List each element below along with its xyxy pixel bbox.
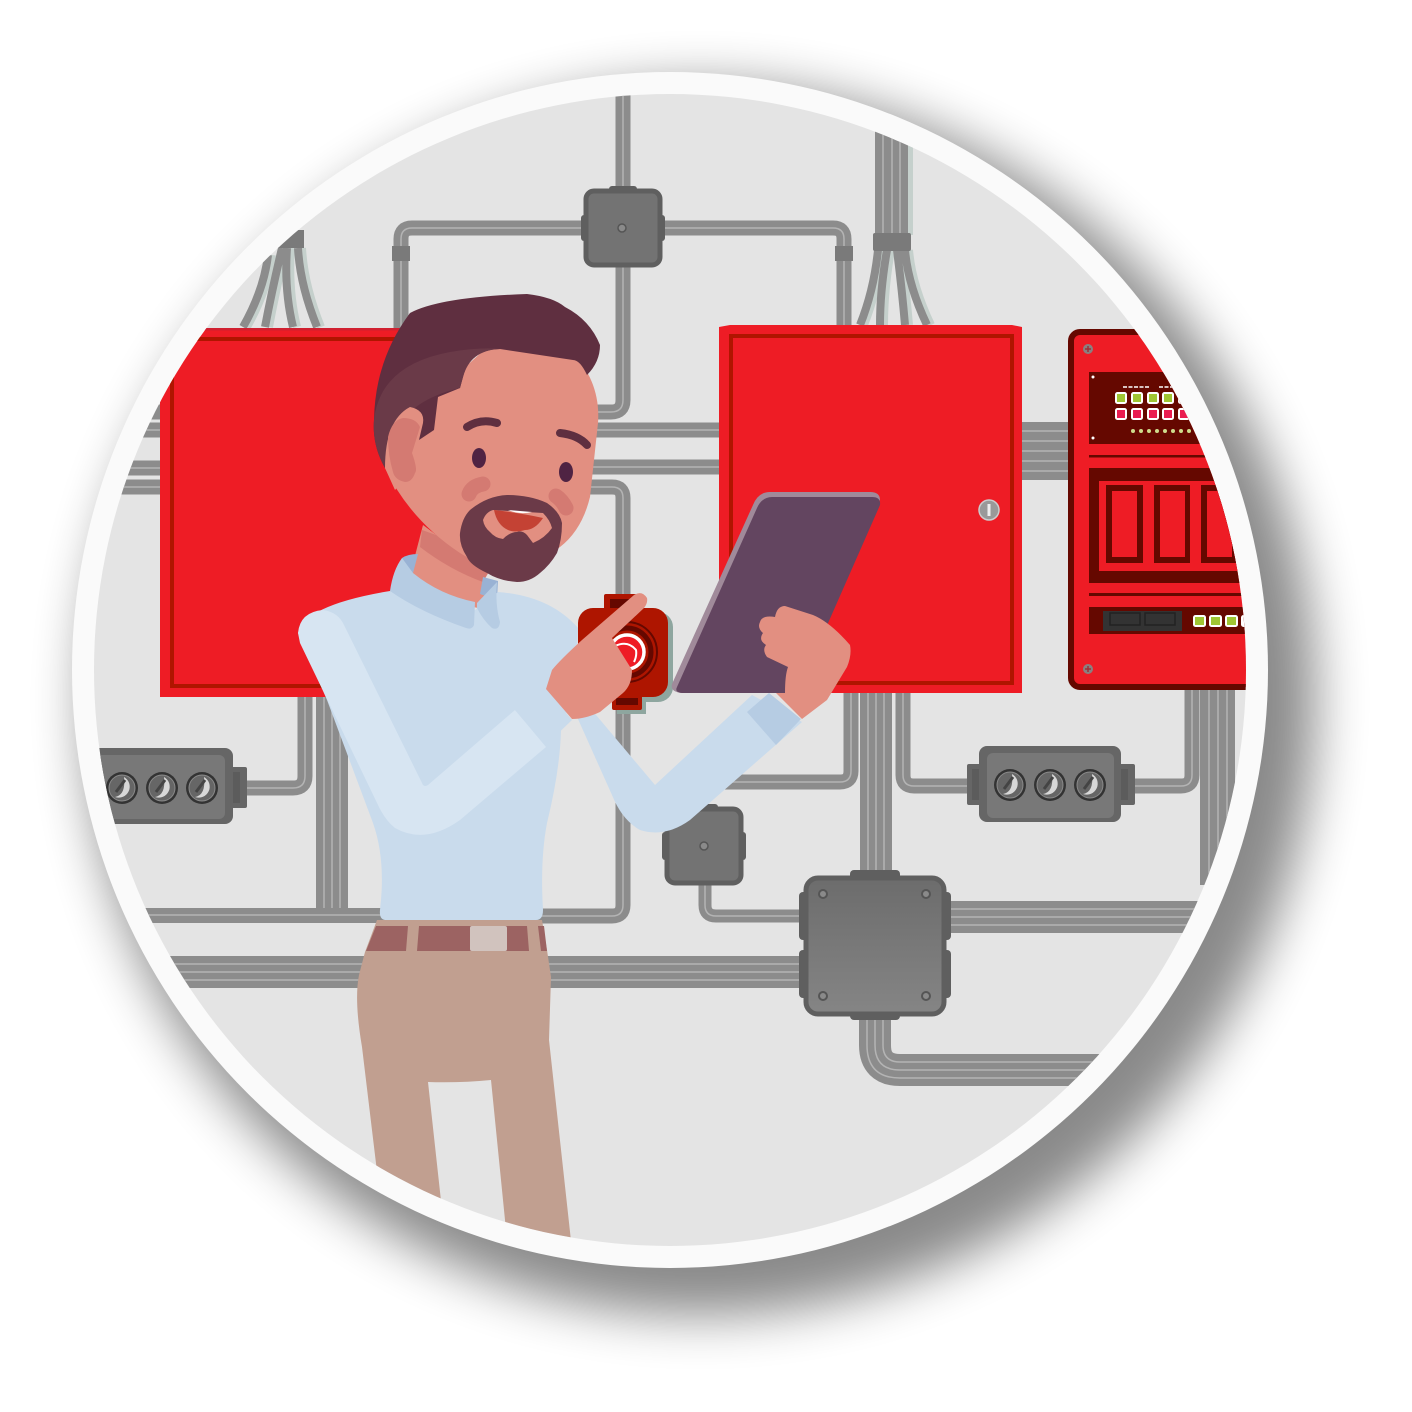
screws	[1083, 344, 1093, 674]
far arm sleeve	[578, 695, 802, 832]
drop shadow	[85, 85, 1315, 1315]
person	[298, 294, 880, 1250]
trousers	[357, 920, 572, 1250]
cheeks	[469, 484, 566, 508]
cabinet lock	[979, 500, 999, 520]
badge scene	[80, 90, 1291, 1250]
junction box: large	[799, 870, 951, 1020]
mouth area	[483, 510, 552, 543]
tablet hand	[759, 606, 851, 719]
junction box: small lower	[662, 804, 746, 883]
badge ring	[72, 72, 1268, 1268]
bundle between right panels	[1022, 422, 1068, 480]
panel: left red cabinet	[160, 328, 460, 697]
hair	[374, 294, 600, 468]
mouth	[494, 510, 543, 532]
collar front	[390, 558, 500, 629]
terminal box: left	[99, 748, 247, 824]
collar back	[402, 554, 498, 596]
meter strip	[1089, 607, 1259, 634]
neck	[412, 525, 484, 608]
breaker block	[1089, 468, 1240, 583]
wire fan right	[860, 130, 931, 325]
shirt torso	[298, 591, 578, 920]
panel: middle red cabinet	[719, 325, 1022, 693]
wire fan left	[243, 230, 321, 327]
terminal box: right	[967, 746, 1135, 822]
status display	[1089, 372, 1200, 444]
eyebrows	[467, 421, 587, 445]
background	[90, 90, 1250, 1250]
panel: right fire alarm control panel	[1068, 329, 1246, 690]
hair highlight	[374, 348, 500, 468]
pointing hand	[546, 593, 647, 719]
tablet	[672, 492, 880, 693]
face	[385, 340, 598, 568]
ear	[385, 407, 423, 490]
beard	[460, 495, 562, 582]
near arm cuff	[561, 713, 572, 730]
junction box: top	[581, 186, 665, 265]
alarm push button	[578, 594, 673, 714]
near arm sleeve	[298, 610, 546, 835]
eyes	[472, 448, 486, 468]
belt	[366, 926, 547, 951]
far arm cuff	[747, 693, 801, 745]
head	[374, 294, 600, 582]
conduit pipes	[110, 90, 1235, 1078]
